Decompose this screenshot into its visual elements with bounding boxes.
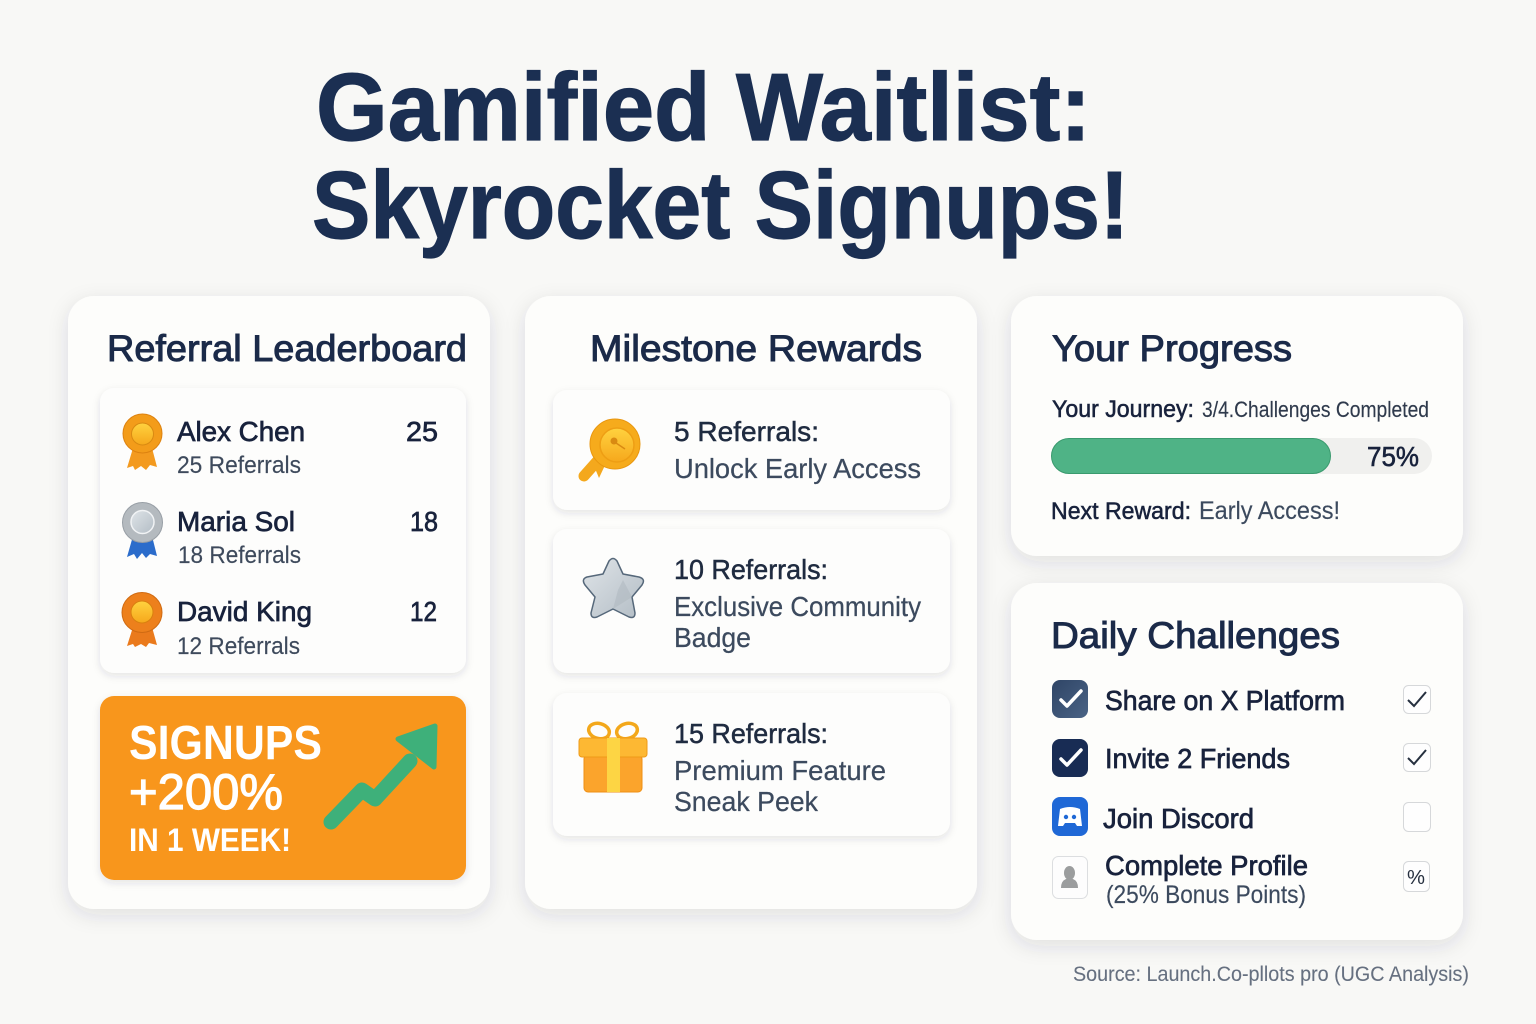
reward card: 15 referrals bbox=[553, 693, 950, 836]
reward card: 10 referrals: Badge bbox=[674, 622, 751, 653]
reward card: 15 referrals: 15 Referrals: bbox=[674, 718, 828, 749]
journey status text: Your Journey: bbox=[1052, 396, 1194, 423]
heading: daily challenges: Daily Challenges bbox=[1051, 615, 1340, 656]
title bbox=[312, 54, 1129, 259]
leaderboard row: David King: 12 bbox=[410, 596, 437, 627]
challenge: invite 2 friends: Invite 2 Friends bbox=[1105, 743, 1290, 774]
leaderboard row: David King: 12 Referrals bbox=[177, 633, 300, 660]
journey status text: 3/4.Challenges Completed bbox=[1202, 397, 1429, 422]
title: Gamified Waitlist: bbox=[316, 54, 1091, 161]
leaderboard row: Alex Chen: 25 bbox=[406, 416, 438, 447]
challenge: invite 2 friends bbox=[1052, 739, 1430, 777]
next reward text bbox=[1051, 497, 1340, 525]
leaderboard row: Maria Sol: 18 bbox=[410, 506, 438, 537]
progress bar 75% bbox=[1051, 438, 1432, 474]
reward card: 10 referrals: Exclusive Community bbox=[674, 591, 921, 622]
leaderboard row: Maria Sol: Maria Sol bbox=[177, 506, 295, 537]
leaderboard row: David King bbox=[177, 596, 437, 660]
next reward text: Early Access! bbox=[1199, 497, 1340, 525]
next reward text: Next Reward: bbox=[1051, 498, 1191, 525]
heading: milestone rewards: Milestone Rewards bbox=[590, 328, 922, 369]
callout: signups +200% in 1 week bbox=[100, 696, 466, 880]
callout: signups +200% in 1 week: IN 1 WEEK! bbox=[129, 822, 291, 858]
challenge: join discord: Join Discord bbox=[1103, 803, 1254, 834]
leaderboard card bbox=[100, 388, 466, 673]
icon: gold key bbox=[584, 419, 640, 478]
panel: daily challenges bbox=[1011, 583, 1463, 940]
challenge: complete profile: % bbox=[1407, 867, 1425, 889]
progress bar 75%: 75% bbox=[1367, 441, 1419, 472]
reward card: 5 referrals: 5 Referrals: bbox=[674, 416, 819, 447]
title: Skyrocket Signups! bbox=[312, 152, 1129, 259]
leaderboard row: Alex Chen: Alex Chen bbox=[177, 416, 305, 447]
challenge: complete profile bbox=[1052, 850, 1430, 909]
reward card: 10 referrals bbox=[553, 529, 950, 673]
panel: your progress bbox=[1011, 296, 1463, 556]
icon: gift box bbox=[579, 721, 647, 792]
reward card: 15 referrals: Sneak Peek bbox=[674, 786, 819, 817]
leaderboard row: Maria Sol: 18 Referrals bbox=[178, 542, 301, 569]
icon: rising green arrow bbox=[331, 726, 435, 822]
reward card: 15 referrals: Premium Feature bbox=[674, 755, 886, 786]
callout: signups +200% in 1 week: +200% bbox=[129, 764, 283, 820]
leaderboard row: Alex Chen bbox=[177, 416, 438, 479]
icon: gold medal bbox=[123, 414, 162, 470]
reward card: 10 referrals: 10 Referrals: bbox=[674, 554, 828, 585]
reward card: 5 referrals bbox=[553, 390, 950, 510]
panel: referral leaderboard bbox=[68, 296, 490, 909]
icon: bronze medal bbox=[122, 592, 162, 647]
icon: silver star bbox=[583, 558, 643, 618]
leaderboard row: Maria Sol bbox=[177, 506, 438, 569]
challenge: complete profile: Complete Profile bbox=[1105, 850, 1308, 881]
source note: Source: Launch.Co-pllots pro (UGC Analysis) bbox=[1073, 963, 1469, 986]
challenge: complete profile: (25% Bonus Points) bbox=[1106, 881, 1306, 909]
panel: milestone rewards bbox=[525, 296, 977, 909]
reward card: 5 referrals: Unlock Early Access bbox=[674, 453, 921, 484]
leaderboard row: Alex Chen: 25 Referrals bbox=[177, 452, 301, 479]
heading: referral leaderboard: Referral Leaderboard bbox=[107, 328, 467, 369]
challenge: join discord bbox=[1052, 797, 1430, 836]
heading: your progress: Your Progress bbox=[1052, 328, 1292, 369]
challenge: share on X platform bbox=[1052, 680, 1430, 718]
icon: silver medal with blue ribbon bbox=[122, 502, 162, 559]
leaderboard row: David King: David King bbox=[177, 596, 312, 627]
callout: signups +200% in 1 week: SIGNUPS bbox=[129, 717, 322, 770]
journey status text bbox=[1052, 396, 1429, 423]
challenge: share on X platform: Share on X Platform bbox=[1105, 685, 1345, 716]
